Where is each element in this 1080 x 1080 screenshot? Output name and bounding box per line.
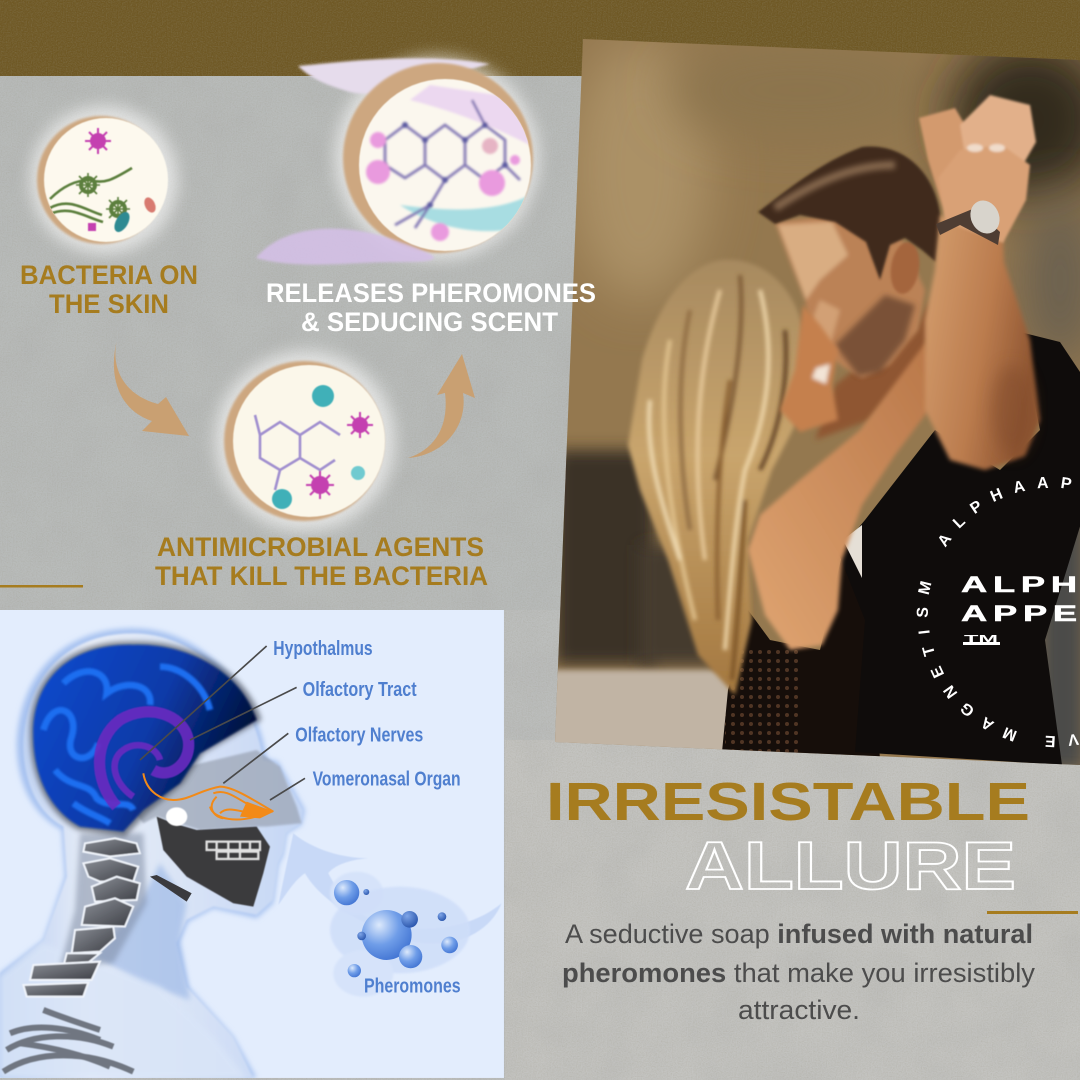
label: releases pheromones: RELEASES PHEROMONES: [266, 278, 596, 308]
icon: green microbes and strands: [50, 168, 132, 222]
pheromone cloud: [330, 872, 470, 997]
accent line: left: [0, 585, 83, 588]
label: olfactory tract: Olfactory Tract: [303, 678, 417, 701]
icon: red cell: [144, 196, 156, 214]
icon: teal microbes: [312, 385, 334, 407]
label: releases pheromones: [266, 278, 596, 337]
label: hypothalamus: Hypothalmus: [273, 637, 373, 660]
arrow: pheromones into nose: [278, 833, 502, 944]
label: pheromones: Pheromones: [364, 974, 461, 997]
label: vomeronasal organ: Vomeronasal Organ: [313, 768, 461, 791]
body text: A seductive soap infused with natural: [565, 919, 1033, 949]
hands: [919, 95, 1036, 243]
top hand: [960, 95, 1036, 170]
top band: olive brown: [0, 0, 1080, 76]
body text: [562, 919, 1036, 1025]
orange olfactory nerves: [143, 773, 273, 820]
man forearm: [925, 215, 1040, 470]
panel: couple photo: [555, 39, 1080, 765]
brand logo text: TM: [964, 634, 998, 645]
ribs: [3, 1010, 133, 1072]
gray skull: [133, 750, 302, 830]
circle: bacteria on the skin: [30, 106, 178, 254]
brain: [30, 642, 262, 837]
throat bar: [150, 875, 192, 902]
man hand: [938, 145, 1030, 243]
heading: allure outlined: ALLURE: [685, 828, 1016, 904]
panel: pheromone pathway diagram: [0, 610, 504, 1078]
circle: releases pheromones with purple swirl: [256, 56, 539, 265]
jaw: [157, 817, 270, 907]
icon: magenta star microbe: [85, 128, 111, 154]
circle: antimicrobial agents: [215, 351, 395, 531]
her far arm behind his neck: [815, 300, 930, 440]
arrow: bacteria to agents: [114, 340, 189, 436]
label: olfactory nerves: Olfactory Nerves: [295, 724, 423, 747]
man ear: [890, 242, 920, 294]
label: bacteria on the skin: [20, 260, 198, 319]
wrist watch: [936, 200, 1000, 245]
neck shading: [60, 833, 147, 967]
arrow: agents to pheromones: [408, 354, 475, 458]
her left fist: [918, 106, 966, 204]
heading: irresistable: IRRESISTABLE: [546, 772, 1030, 832]
man face: [775, 215, 925, 378]
elbow shadow: [989, 368, 1023, 446]
woman arm: [748, 342, 940, 650]
woman hair: [628, 260, 808, 695]
body text: attractive.: [738, 995, 860, 1025]
label: antimicrobial agents: [155, 532, 488, 591]
label: releases pheromones: & SEDUCING SCENT: [301, 307, 558, 337]
woman face: [780, 305, 838, 432]
spine: [23, 838, 140, 997]
circular brand text: [916, 477, 1080, 748]
brand logo text: [961, 573, 1080, 645]
label: bacteria on the skin: THE SKIN: [49, 289, 169, 319]
white shirt sliver: [845, 525, 862, 578]
icon: purple haze: [410, 85, 530, 145]
icon: teal wash: [400, 195, 530, 231]
knuckles: [967, 144, 983, 152]
photo background: [550, 35, 1080, 770]
icon: magenta microbes: [306, 412, 373, 499]
purple spiral: [100, 712, 189, 807]
man hair: [758, 146, 941, 280]
man beard: [835, 295, 915, 376]
woman black top: [722, 555, 880, 760]
label: bacteria on the skin: BACTERIA ON: [20, 260, 198, 290]
man black shirt: [838, 332, 1080, 765]
label lines: [140, 646, 305, 800]
icon: teal bacterium: [114, 211, 130, 233]
label: antimicrobial agents: THAT KILL THE BACTERIA: [155, 561, 488, 591]
body text: pheromones that make you irresistibly: [562, 958, 1036, 988]
teeth: [207, 842, 260, 859]
icon: molecule network: [385, 100, 520, 228]
icon: molecule: [255, 415, 340, 490]
label: antimicrobial agents: ANTIMICROBIAL AGENTS: [157, 532, 484, 562]
accent line: right: [987, 911, 1078, 914]
head silhouette: [0, 628, 305, 1078]
chest shading: [0, 948, 164, 1078]
mesh pattern: [725, 650, 800, 755]
